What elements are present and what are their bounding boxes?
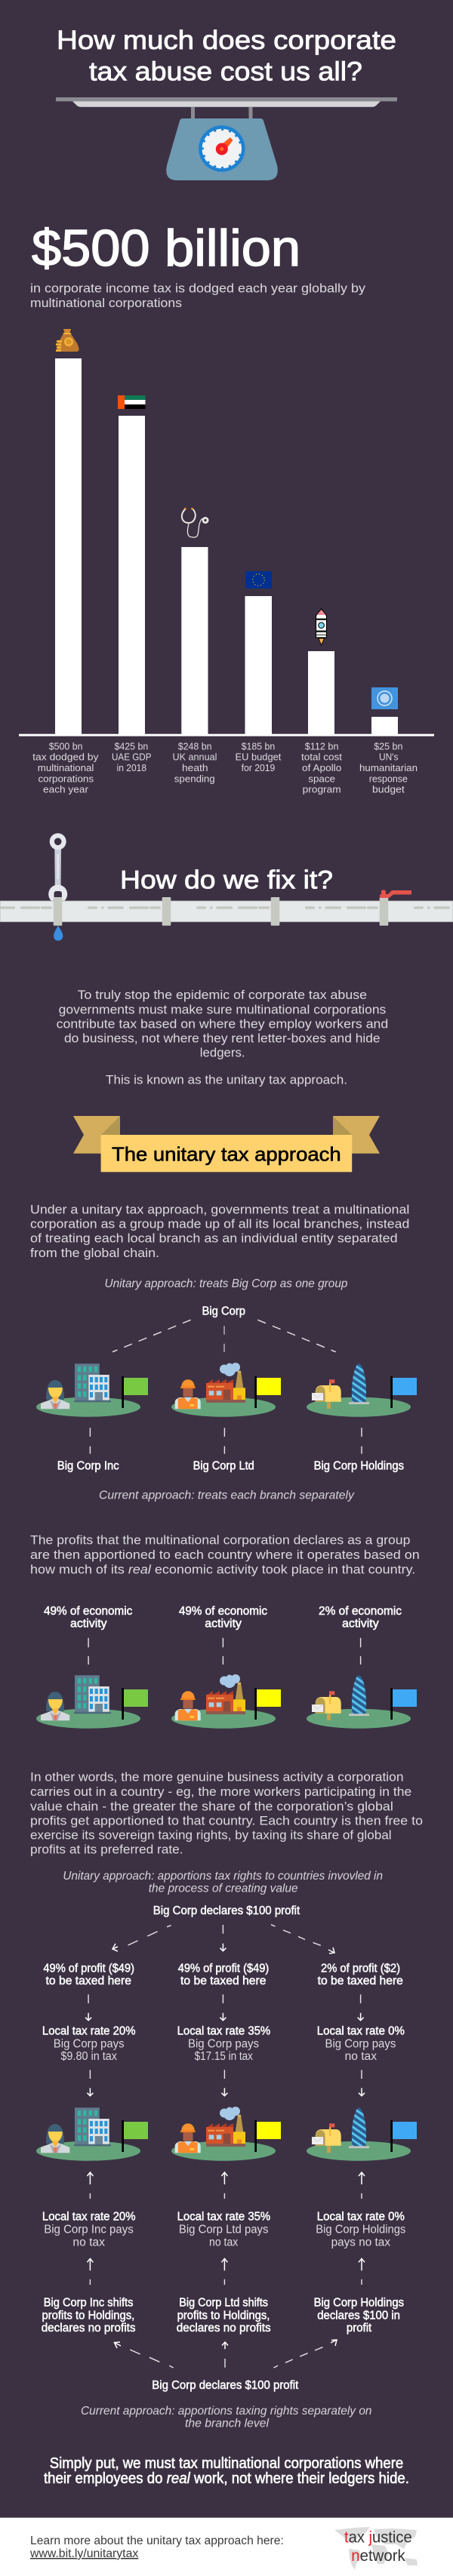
label: Apollo <box>301 740 342 795</box>
result: Holdings <box>317 2025 405 2063</box>
activity connector lines <box>88 1638 361 1665</box>
current result: Inc: Local tax rate 20% <box>42 2210 136 2223</box>
text block: unitary definition <box>30 1202 409 1260</box>
text block: apportioning profits: The profits that the multinational corporation declares as a group <box>30 1533 410 1548</box>
label: UK health: heath <box>182 762 208 773</box>
title: tax abuse cost us all? <box>89 57 362 87</box>
text block: stopping tax abuse: This is known as the unitary tax approach. <box>106 1073 347 1087</box>
profit share labels <box>43 1962 403 1987</box>
label: tax dodged <box>32 740 99 795</box>
label: UN budget: budget <box>372 784 405 795</box>
icon: water drop <box>54 926 63 941</box>
current result: Holdings: Local tax rate 0% <box>317 2210 405 2223</box>
shifting: Ltd: declares no profits <box>177 2322 271 2335</box>
current result: Ltd <box>177 2210 270 2249</box>
branch: Big Corp Holdings <box>307 1675 417 1729</box>
icon: pipe <box>0 897 453 926</box>
branch names <box>57 1459 404 1472</box>
label: 2% Holdings: activity <box>342 1618 379 1631</box>
upward arrows from local tax <box>87 2172 365 2199</box>
intro text: multinational corporations <box>30 296 182 310</box>
text block: unitary definition: corporation as a group made up of all its local branches, instead <box>30 1217 409 1231</box>
text block: stopping tax abuse: To truly stop the epidemic of corporate tax abuse <box>78 988 367 1002</box>
shifting: Inc: profits to Holdings, <box>42 2309 134 2322</box>
caption: unitary apportionment <box>63 1870 383 1895</box>
heading: how do we fix it: How do we fix it? <box>120 865 333 894</box>
title: How much does corporate <box>57 26 396 55</box>
footer link: www.bit.ly/unitarytax <box>29 2547 139 2560</box>
intro text: in corporate income tax is dodged each year globally by <box>30 281 366 296</box>
label: UAE GDP: in 2018 <box>117 762 146 773</box>
label: tax dodged: tax dodged by <box>32 752 99 763</box>
result: Ltd: Local tax rate 35% <box>177 2025 270 2038</box>
text block: unitary definition: from the global chain. <box>30 1246 159 1260</box>
label: Big Corp: Big Corp <box>202 1305 245 1318</box>
logo: tax justice network <box>334 2527 418 2570</box>
logo: tax justice network: tax justice <box>344 2528 412 2546</box>
branch: Big Corp Inc <box>36 2107 148 2161</box>
current approach tax results <box>42 2210 406 2249</box>
current result: Inc: no tax <box>72 2236 105 2249</box>
bar: EU budget $185 bn <box>245 596 272 736</box>
label: UN budget: humanitarian <box>359 762 418 773</box>
intro text <box>30 281 366 310</box>
label: UAE GDP: UAE GDP <box>112 752 151 763</box>
caption: current apportionment <box>81 2405 372 2430</box>
conclusion: their employees do real work, not where their ledgers hide. <box>44 2470 409 2487</box>
unitary tax results <box>42 2025 405 2063</box>
label: 49% Inc: activity <box>70 1618 107 1631</box>
footer panel <box>0 2518 453 2576</box>
current result: Holdings: pays no tax <box>331 2236 390 2249</box>
shifting: Ltd: profits to Holdings, <box>177 2309 270 2322</box>
split arrows from group profit <box>112 1925 334 1954</box>
label: 49% Ltd: activity <box>205 1618 242 1631</box>
label: 49% Inc: 49% of economic <box>44 1605 133 1618</box>
label: UK health: UK annual <box>172 752 217 763</box>
bar: UN humanitarian $25 bn <box>371 717 398 736</box>
label: 2% Holdings: 2% of economic <box>319 1605 402 1618</box>
caption: unitary approach: Unitary approach: treats Big Corp as one group <box>104 1277 347 1290</box>
text block: in other words: carries out in a country - eg, the more workers participating in the <box>30 1784 411 1799</box>
result: Inc: Local tax rate 20% <box>42 2025 136 2038</box>
label: UN budget: UN's <box>379 752 398 763</box>
branch icons row 3 <box>36 2107 417 2161</box>
caption: unitary apportionment: the process of creating value <box>149 1883 298 1895</box>
label: UN budget <box>359 740 418 795</box>
profit share labels: to be taxed here <box>318 1975 403 1987</box>
caption: unitary apportionment: Unitary approach: apportions tax rights to countries invovled in <box>63 1870 383 1883</box>
shifting: Holdings: Big Corp Holdings <box>314 2296 404 2309</box>
text block: in other words: profits at its preferred rate. <box>30 1843 183 1857</box>
label: Apollo: program <box>303 784 341 795</box>
result: Holdings: Local tax rate 0% <box>317 2025 405 2038</box>
merging arrows from group profit <box>115 2340 337 2368</box>
label: 49% Inc <box>44 1605 133 1631</box>
text block: apportioning profits <box>30 1533 420 1576</box>
caption: current apportionment: Current approach: apportions taxing rights separately on <box>81 2405 372 2418</box>
caption: current apportionment: the branch level <box>185 2418 269 2430</box>
branch: Big Corp Holdings <box>307 2107 417 2161</box>
conclusion <box>44 2455 409 2487</box>
current result: Inc <box>42 2210 136 2249</box>
shifting: Ltd: Big Corp Ltd shifts <box>179 2296 268 2309</box>
bar: UAE GDP $425 bn <box>119 416 145 736</box>
shifting: Inc: Big Corp Inc shifts <box>44 2296 134 2309</box>
shifting: Holdings: profit <box>347 2322 372 2335</box>
arrows to branches <box>87 2070 365 2096</box>
result: Holdings: Big Corp pays <box>325 2038 396 2051</box>
text block: stopping tax abuse: do business, not where they rent letter-boxes and hide <box>64 1031 381 1046</box>
text block: apportioning profits: how much of its real economic activity took place in that country. <box>30 1562 415 1576</box>
label: Apollo: space <box>308 773 335 785</box>
text block: in other words: value chain - the greater the share of the corporation’s global <box>30 1799 393 1813</box>
bar: tax dodged $500 bn <box>55 358 82 736</box>
text block: in other words: exercise its sovereign taxing rights, by taxing its share of global <box>30 1828 392 1843</box>
label: Apollo: of Apollo <box>302 762 341 773</box>
label: Big Corp declares profit current: Big Corp declares $100 profit <box>152 2379 299 2392</box>
bar chart labels <box>32 740 418 795</box>
text block: in other words: profits get apportioned to that country. Each country is then free to <box>30 1813 423 1827</box>
text block: stopping tax abuse: governments must make sure multinational corporations <box>59 1002 386 1016</box>
conclusion: Simply put, we must tax multinational corporations where <box>50 2455 403 2472</box>
label: UAE GDP <box>112 740 151 773</box>
branch: Big Corp Inc <box>36 1675 148 1729</box>
result: Ltd: $17.15 in tax <box>195 2050 253 2063</box>
branch names: Big Corp Holdings <box>314 1459 404 1472</box>
result: Holdings: no tax <box>345 2050 377 2063</box>
label: 2% Holdings <box>319 1605 402 1631</box>
branch icons row 2 <box>36 1674 417 1729</box>
text block: in other words <box>30 1770 423 1857</box>
shifting: Inc <box>42 2296 136 2335</box>
current result: Holdings: Big Corp Holdings <box>316 2223 406 2236</box>
current result: Inc: Big Corp Inc pays <box>44 2223 134 2236</box>
group connector lines <box>112 1320 336 1352</box>
label: Apollo: total cost <box>301 752 342 763</box>
headline figure: $500 billion: $500 billion <box>32 220 300 277</box>
current result: Ltd: no tax <box>209 2236 239 2249</box>
label: UK health: spending <box>174 773 215 785</box>
label: EU budget: $185 bn <box>242 740 275 752</box>
branch: Big Corp Holdings <box>307 1363 417 1417</box>
icon: stethoscope <box>182 508 208 537</box>
icon: red valve handle <box>380 890 411 898</box>
profit share labels: to be taxed here <box>45 1975 131 1987</box>
branch: Big Corp Inc <box>36 1363 148 1417</box>
banner: the unitary tax approach <box>73 1116 380 1172</box>
logo: tax justice network: network <box>351 2547 405 2565</box>
text block: stopping tax abuse: ledgers. <box>200 1046 245 1060</box>
label: UK health <box>172 740 217 785</box>
branch names: Big Corp Inc <box>57 1459 119 1472</box>
label: 49% Ltd <box>179 1605 267 1631</box>
title <box>57 26 396 87</box>
icon: rocket <box>316 609 326 645</box>
result: Inc: $9.80 in tax <box>60 2050 117 2063</box>
result: Ltd <box>177 2025 270 2063</box>
profit shifting labels <box>42 2296 404 2335</box>
icon: UN flag <box>371 687 398 709</box>
label: tax dodged: multinational <box>38 762 94 773</box>
bar: UK health $248 bn <box>181 547 208 736</box>
icon: money bag <box>56 329 79 352</box>
caption: current approach: Current approach: treats each branch separately <box>99 1489 355 1502</box>
branch connector lines <box>90 1428 362 1454</box>
label: tax dodged: $500 bn <box>49 740 83 752</box>
shifting: Ltd <box>177 2296 271 2335</box>
upward arrows to local tax <box>87 2258 365 2285</box>
bar: Apollo $112 bn <box>308 651 334 736</box>
icon: EU flag <box>245 571 272 589</box>
label: UN budget: response <box>369 773 408 785</box>
icon: wrench <box>48 833 67 904</box>
shifting: Holdings: declares $100 in <box>317 2309 400 2322</box>
branch: Big Corp Ltd <box>171 2107 281 2161</box>
shifting: Inc: declares no profits <box>42 2322 136 2335</box>
branch icons row 1 <box>36 1363 417 1417</box>
label: UN budget: $25 bn <box>374 740 403 752</box>
bar chart <box>19 329 434 736</box>
result: Inc <box>42 2025 136 2063</box>
arrows to local tax rate <box>85 1994 364 2021</box>
result: Ltd: Big Corp pays <box>188 2038 259 2051</box>
banner title: The unitary tax approach <box>112 1142 341 1165</box>
result: Inc: Big Corp pays <box>54 2038 125 2051</box>
branch names: Big Corp Ltd <box>193 1459 254 1472</box>
economic activity labels <box>44 1605 402 1631</box>
profit share labels: to be taxed here <box>180 1975 266 1987</box>
chart baseline <box>19 734 434 736</box>
label: tax dodged: each year <box>43 784 89 795</box>
label: Apollo: $112 bn <box>305 740 338 752</box>
label: EU budget: EU budget <box>236 752 282 763</box>
branch: Big Corp Ltd <box>171 1363 281 1417</box>
text block: apportioning profits: are then apportioned to each country where it operates based on <box>30 1548 420 1562</box>
profit share labels: 49% of profit ($49) <box>178 1962 269 1975</box>
label: tax dodged: corporations <box>38 773 94 785</box>
label: Big Corp declares profit: Big Corp declares $100 profit <box>153 1904 300 1917</box>
label: EU budget <box>236 740 282 773</box>
profit share labels: 2% of profit ($2) <box>321 1962 400 1975</box>
text block: unitary definition: Under a unitary tax approach, governments treat a multinational <box>30 1202 409 1216</box>
text block: stopping tax abuse: contribute tax based on where they employ workers and <box>57 1016 388 1031</box>
text block: unitary definition: of treating each local branch as an individual entity separated <box>30 1231 398 1246</box>
text block: stopping tax abuse <box>57 988 388 1087</box>
label: 49% Ltd: 49% of economic <box>179 1605 267 1618</box>
icon: UAE flag <box>118 395 145 409</box>
text block: in other words: In other words, the more genuine business activity a corporation <box>30 1770 404 1784</box>
shifting: Holdings <box>314 2296 404 2335</box>
footer text: Learn more about the unitary tax approach here: <box>30 2535 284 2547</box>
current result: Holdings <box>316 2210 406 2249</box>
current result: Ltd: Local tax rate 35% <box>177 2210 270 2223</box>
label: UK health: $248 bn <box>178 740 211 752</box>
label: UAE GDP: $425 bn <box>115 740 148 752</box>
icon: weighing scale <box>56 97 397 180</box>
profit share labels: 49% of profit ($49) <box>43 1962 134 1975</box>
label: EU budget: for 2019 <box>242 762 275 773</box>
current result: Ltd: Big Corp Ltd pays <box>179 2223 269 2236</box>
branch: Big Corp Ltd <box>171 1674 281 1729</box>
